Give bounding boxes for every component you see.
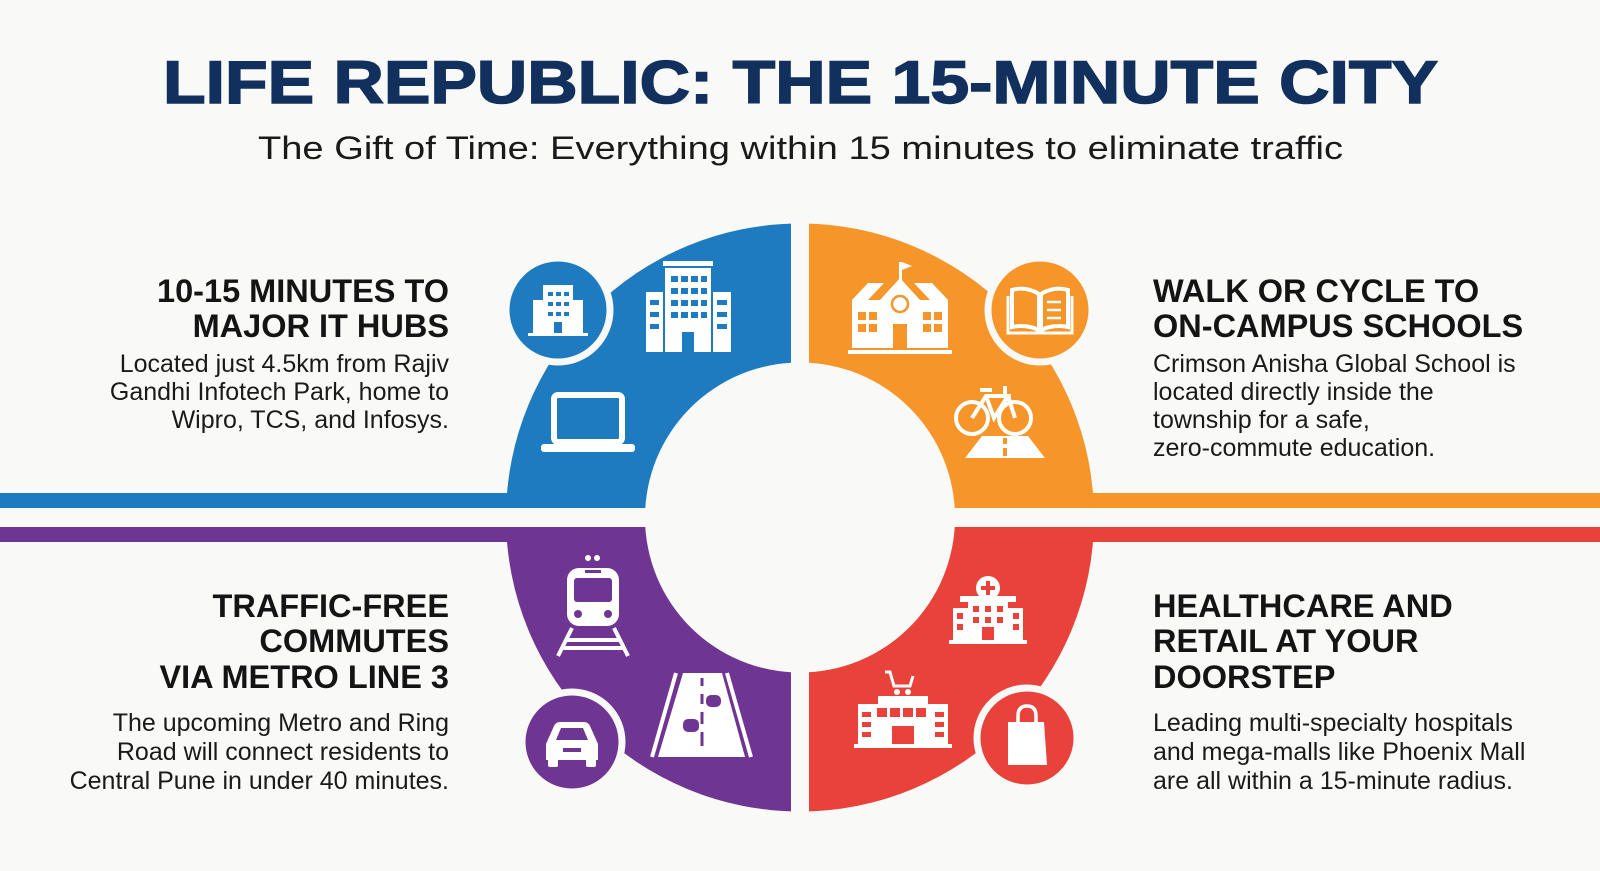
text: IT hubs: 10-15 MINUTES TO (157, 273, 449, 309)
quadrant: schools (orange) (809, 224, 1600, 784)
icon: book circle (988, 258, 1092, 362)
text: healthcare: DOORSTEP (1153, 659, 1335, 695)
quadrant: metro (purple) (0, 527, 1068, 812)
icon: school building (848, 262, 952, 354)
icon: bicycle on road (956, 386, 1045, 458)
text: schools: township for a safe, (1153, 406, 1370, 434)
text: schools: ON-CAMPUS SCHOOLS (1153, 308, 1523, 344)
text: schools (1153, 273, 1523, 462)
icon: mall (854, 672, 952, 748)
text: schools: WALK OR CYCLE TO (1153, 273, 1479, 309)
icon: small office circle (506, 258, 610, 362)
text: metro: The upcoming Metro and Ring (113, 709, 449, 737)
text: schools: Crimson Anisha Global School is (1153, 350, 1516, 378)
text: metro (70, 588, 449, 795)
text: healthcare: and mega-malls like Phoenix Mall (1153, 738, 1525, 766)
quadrant: healthcare and retail (red) (809, 527, 1600, 812)
text: IT hubs (110, 273, 450, 434)
text: IT hubs: Gandhi Infotech Park, home to (110, 378, 449, 406)
text: healthcare (1153, 588, 1525, 795)
text: metro: TRAFFIC-FREE (212, 588, 449, 624)
text: schools: zero-commute education. (1153, 434, 1435, 462)
text: healthcare: Leading multi-specialty hospitals (1153, 709, 1513, 737)
text: IT hubs: MAJOR IT HUBS (193, 308, 449, 344)
text: schools: located directly inside the (1153, 378, 1434, 406)
subtitle: The Gift of Time: Everything within 15 minutes to eliminate traffic (258, 130, 1343, 166)
text: metro: Central Pune in under 40 minutes. (70, 767, 449, 795)
icon: hospital (949, 576, 1027, 644)
text: healthcare: RETAIL AT YOUR (1153, 623, 1418, 659)
icon: train (558, 555, 628, 656)
text: metro: Road will connect residents to (117, 738, 449, 766)
quadrant: IT hubs (blue) (0, 224, 1094, 812)
text: IT hubs: Wipro, TCS, and Infosys. (172, 406, 449, 434)
icon: laptop (541, 395, 635, 452)
text: healthcare: are all within a 15-minute radius. (1153, 767, 1513, 795)
title: LIFE REPUBLIC: THE 15-MINUTE CITY (163, 49, 1438, 116)
text: metro: VIA METRO LINE 3 (159, 659, 449, 695)
icon: shopping bag circle (977, 688, 1077, 788)
text: metro: COMMUTES (259, 623, 449, 659)
icon: car circle (522, 692, 622, 792)
text: IT hubs: Located just 4.5km from Rajiv (120, 350, 450, 378)
icon: road with cars (652, 673, 751, 757)
icon: office tower (646, 261, 731, 352)
text: healthcare: HEALTHCARE AND (1153, 588, 1453, 624)
